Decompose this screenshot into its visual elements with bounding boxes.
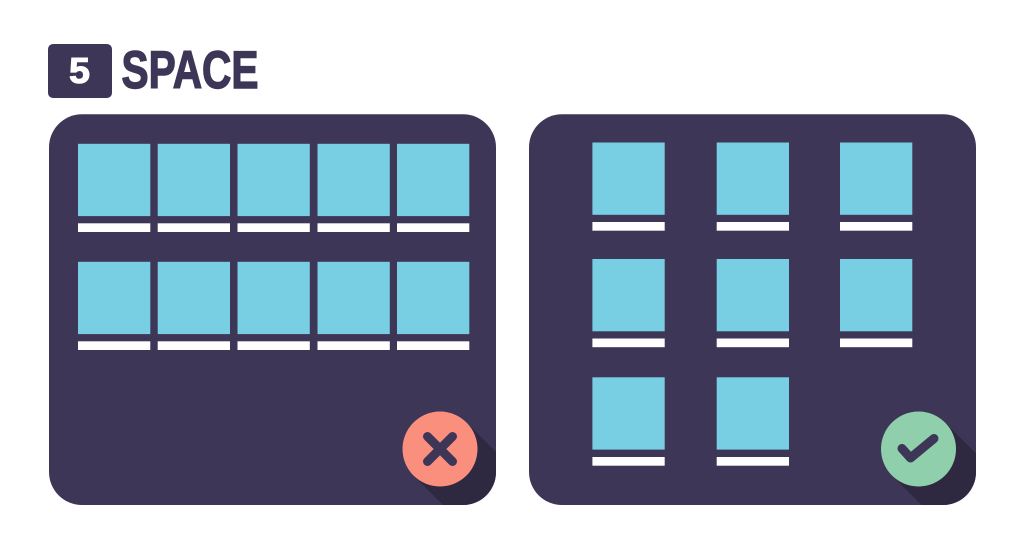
- tile grid: two tight rows: [78, 144, 469, 350]
- heading: step 5 space: [48, 41, 258, 100]
- tile grid: generous spacing: [592, 142, 912, 466]
- title: SPACE: [122, 41, 258, 100]
- badge: number 5: [48, 44, 112, 98]
- icon: green check badge: [881, 412, 976, 505]
- badge: number 5: 5: [69, 50, 90, 91]
- panel: crowded layout (bad): [49, 114, 496, 505]
- panel: spaced layout (good): [529, 114, 976, 505]
- icon: red cross badge: [402, 412, 496, 505]
